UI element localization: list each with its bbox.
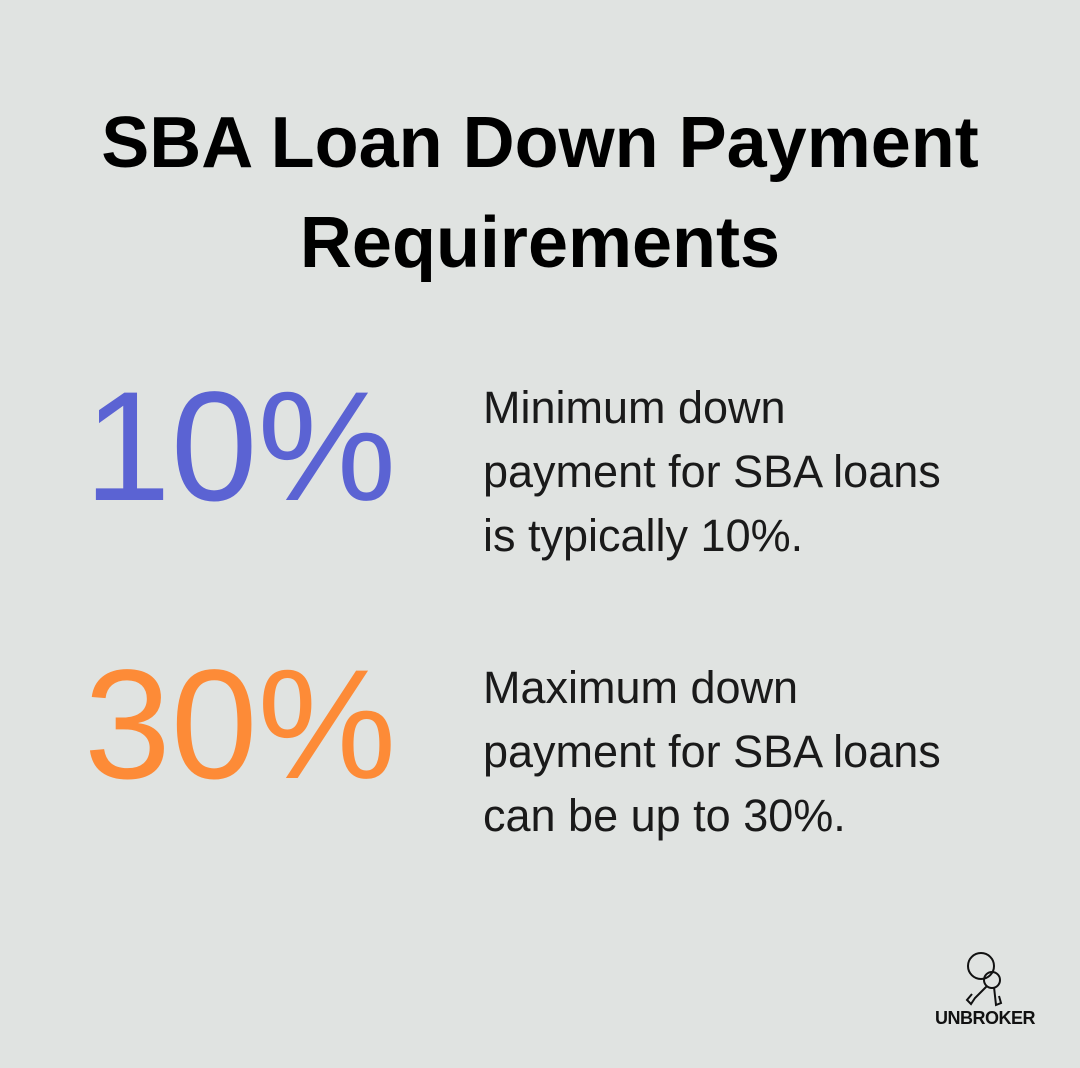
title: Requirements [300, 203, 780, 283]
text: maximum [483, 662, 941, 841]
text: minimum [483, 382, 941, 561]
stat: 10%: 10% [84, 360, 396, 534]
text: minimum: Minimum down [483, 382, 786, 433]
text: minimum: is typically 10%. [483, 510, 803, 561]
text: minimum: payment for SBA loans [483, 446, 941, 497]
text: maximum: Maximum down [483, 662, 798, 713]
brand name: UNBROKER [935, 1008, 1035, 1028]
icon: keys [966, 952, 1002, 1006]
text: maximum: payment for SBA loans [483, 726, 941, 777]
title: SBA Loan Down Payment [101, 103, 979, 183]
stat: 30%: 30% [84, 638, 396, 812]
text: maximum: can be up to 30%. [483, 790, 846, 841]
title [101, 103, 979, 283]
logo [935, 952, 1036, 1028]
